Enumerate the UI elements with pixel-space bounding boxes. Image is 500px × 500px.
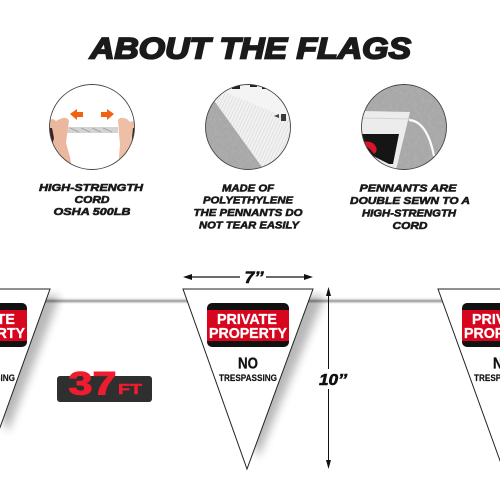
icon: double sewn pennant — [361, 84, 447, 170]
pennant: right — [438, 289, 500, 469]
caption: double sewn: CORD — [392, 220, 428, 232]
caption: high-strength cord: HIGH-STRENGTH — [39, 182, 143, 194]
caption: polyethylene: POLYETHYLENE — [203, 194, 294, 206]
caption: polyethylene — [194, 182, 302, 232]
caption: polyethylene: MADE OF — [222, 182, 275, 194]
sign panel: PRIVATE — [217, 311, 277, 328]
icon: cord being pulled — [49, 84, 135, 170]
sign panel: PROPERTY — [209, 325, 287, 342]
dimension: 7 inches width — [183, 268, 313, 287]
title: ABOUT THE FLAGS — [89, 32, 411, 66]
dimension: 7 inches width: 7’’ — [244, 268, 264, 287]
sign text: no: NO — [238, 356, 258, 372]
arrow: left orange — [70, 109, 83, 120]
left hand — [50, 118, 71, 164]
arrow: right orange — [101, 109, 114, 120]
caption: polyethylene: NOT TEAR EASILY — [199, 220, 300, 232]
caption: polyethylene: THE PENNANTS DO — [194, 207, 302, 219]
caption: double sewn: HIGH-STRENGTH — [362, 208, 456, 220]
sign text: trespassing: TRESPASSING — [219, 373, 277, 384]
caption: double sewn — [350, 182, 470, 232]
sign panel — [0, 303, 27, 347]
caption: double sewn: PENNANTS ARE — [360, 182, 458, 194]
cord between pennants — [0, 298, 500, 304]
length badge: 37 ft: FT — [118, 382, 142, 398]
caption: high-strength cord: OSHA 500LB — [54, 206, 131, 218]
cord — [66, 127, 118, 133]
pennant: center — [183, 289, 325, 469]
caption: high-strength cord — [39, 182, 143, 218]
dimension: 10 inches height — [319, 287, 348, 469]
caption: double sewn: DOUBLE SEWN TO A — [350, 195, 470, 207]
sign panel — [207, 303, 289, 347]
right hand — [118, 118, 134, 160]
dimension: 10 inches height: 10’’ — [319, 372, 348, 389]
length badge: 37 ft: 37 — [68, 366, 116, 402]
pennant: left — [0, 289, 60, 469]
caption: high-strength cord: CORD — [74, 194, 110, 206]
sign panel — [462, 303, 500, 347]
icon: polyethylene material — [205, 84, 291, 170]
length badge: 37 ft — [57, 366, 152, 402]
